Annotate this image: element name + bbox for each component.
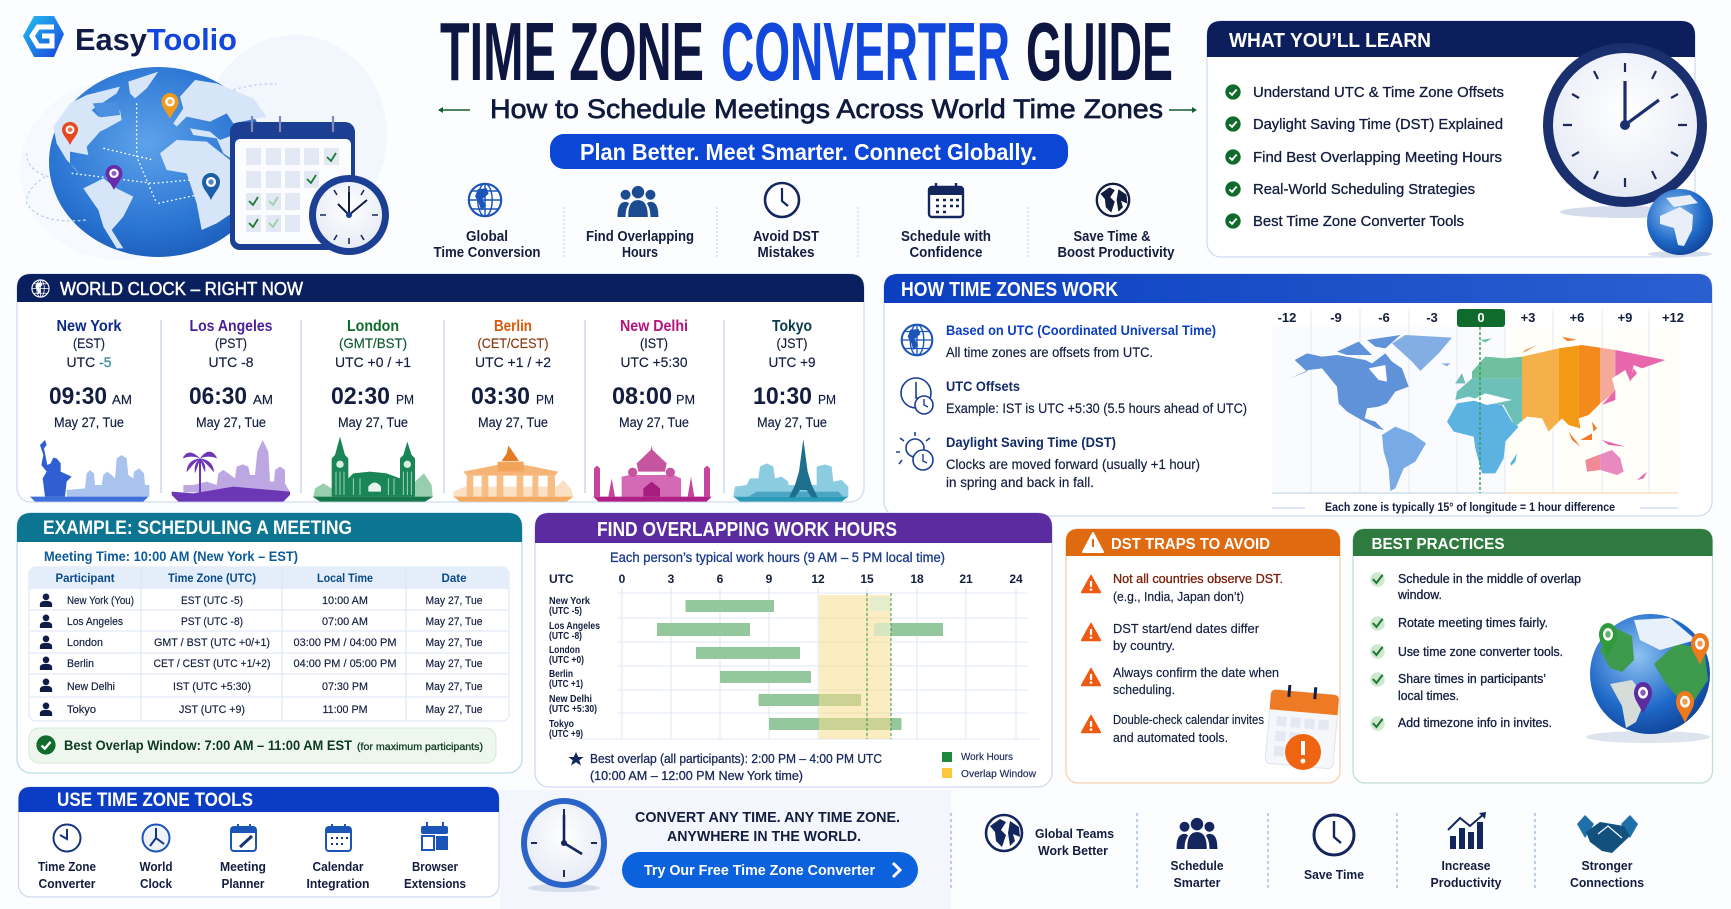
row: Los Angeles	[40, 615, 482, 628]
best overlap note: (10:00 AM – 12:00 PM New York time)	[590, 768, 803, 783]
map: zone labels: -9	[1330, 310, 1342, 325]
map: zone labels: -3	[1426, 310, 1438, 325]
clock: Los Angeles: AM	[253, 392, 273, 407]
practice list: Schedule in the middle of overlap	[1398, 572, 1581, 586]
overlap header	[535, 513, 1052, 543]
trap: confirm date: Always confirm the date when	[1113, 666, 1279, 680]
icon: small globe	[1647, 189, 1713, 257]
practices header: BEST PRACTICES	[1372, 536, 1505, 553]
tool: browser extensions	[404, 822, 466, 891]
chart row labels: (UTC +5:30)	[549, 703, 597, 715]
chart row labels: Los Angeles	[549, 620, 600, 632]
title: CONVERTER	[721, 5, 1010, 98]
example header: EXAMPLE: SCHEDULING A MEETING	[43, 517, 352, 539]
clock: Tokyo: Tokyo	[772, 318, 812, 335]
trap: dates differ: by country.	[1113, 639, 1175, 653]
DST header: DST TRAPS TO AVOID	[1111, 536, 1270, 553]
tagline pill	[550, 134, 1068, 169]
clock: Los Angeles: May 27, Tue	[196, 415, 266, 430]
benefit: stronger connections: Stronger	[1582, 859, 1633, 873]
chart row labels: Berlin	[549, 668, 573, 680]
trap: not all countries: (e.g., India, Japan don’t)	[1113, 590, 1244, 604]
item: UTC offsets	[901, 378, 1247, 416]
chart axis: 12	[811, 572, 825, 586]
clock: New York: New York	[56, 318, 122, 335]
practice list	[1370, 572, 1581, 731]
how time zones header: HOW TIME ZONES WORK	[901, 279, 1118, 301]
chart legend	[942, 751, 1036, 780]
clock: London: UTC +0 / +1	[335, 354, 411, 370]
benefit: global time conversion: Global	[466, 229, 508, 245]
item: based on UTC	[902, 322, 1216, 360]
benefit: stronger connections: Connections	[1570, 876, 1644, 890]
chart axis: 21	[959, 572, 973, 586]
benefit: schedule with confidence: Confidence	[910, 245, 982, 261]
benefit: schedule smarter: Schedule	[1170, 859, 1224, 873]
clock: London: PM	[396, 392, 414, 407]
chart row labels: Tokyo	[549, 718, 574, 730]
overlap window	[819, 593, 891, 739]
chart axis: 3	[668, 572, 675, 586]
callout: best overlap window: (for maximum participants)	[357, 741, 483, 753]
chart: work hours gantt	[549, 572, 1040, 740]
world clock header	[17, 274, 864, 302]
panel: what you'll learn	[1207, 21, 1713, 257]
clock: Los Angeles: (PST)	[215, 335, 247, 351]
clock: New Delhi: May 27, Tue	[619, 415, 689, 430]
row: Berlin: 04:00 PM / 05:00 PM	[294, 658, 396, 670]
learn list: Understand UTC & Time Zone Offsets	[1253, 85, 1504, 101]
benefit: increase productivity	[1430, 812, 1502, 890]
clock: Tokyo: 10:30	[753, 383, 812, 410]
best overlap note	[568, 751, 882, 783]
chart row labels: (UTC +1)	[549, 678, 583, 690]
learn list	[1225, 84, 1504, 230]
tool: calendar integration: Integration	[306, 876, 370, 891]
panel: DST traps to avoid	[1066, 529, 1340, 783]
clock: London: London	[347, 318, 399, 335]
row: New Delhi: New Delhi	[67, 681, 115, 693]
row: Berlin	[40, 657, 482, 670]
map: zone labels: -12	[1278, 310, 1296, 325]
benefit: global time conversion	[434, 184, 540, 261]
clock: London: May 27, Tue	[338, 415, 408, 430]
practice list: Use time zone converter tools.	[1398, 645, 1563, 659]
practice list: window.	[1397, 588, 1442, 602]
item: daylight saving time: Daylight Saving Time (DST)	[946, 434, 1116, 450]
row: Tokyo: 11:00 PM	[322, 704, 368, 716]
tool: browser extensions: Extensions	[404, 876, 466, 891]
clock: New Delhi: 08:00	[612, 383, 672, 410]
benefit: schedule smarter: Smarter	[1174, 876, 1221, 890]
title: TIME ZONE	[440, 5, 704, 98]
clock: Berlin: (CET/CEST)	[478, 335, 548, 351]
clock: Tokyo: PM	[818, 392, 836, 407]
chart bars	[657, 600, 943, 730]
benefit: avoid DST mistakes: Mistakes	[758, 245, 814, 261]
map: zone labels: +12	[1662, 310, 1684, 325]
chart axis: 15	[860, 572, 874, 586]
clock: Berlin: May 27, Tue	[478, 415, 548, 430]
tools header: USE TIME ZONE TOOLS	[57, 790, 253, 811]
skyline: Los Angeles	[172, 440, 290, 502]
row: New Delhi: May 27, Tue	[426, 681, 482, 693]
illustration: calendar	[230, 116, 355, 250]
benefit: schedule smarter	[1170, 818, 1224, 890]
trap: confirm date: scheduling.	[1113, 683, 1175, 697]
row: London: GMT / BST (UTC +0/+1)	[154, 637, 270, 649]
chart axis: 0	[619, 572, 626, 586]
item: based on UTC: Based on UTC (Coordinated Universal Time)	[946, 322, 1216, 338]
benefit: increase productivity: Increase	[1442, 859, 1491, 873]
clock: Tokyo: (JST)	[776, 335, 808, 351]
map: zone labels: +3	[1521, 310, 1535, 325]
benefit: schedule with confidence: Schedule with	[901, 229, 991, 245]
trap: double-check invites	[1082, 713, 1264, 745]
row: New York: May 27, Tue	[426, 595, 482, 607]
callout: best overlap window	[29, 728, 496, 763]
clock: London: (GMT/BST)	[339, 335, 407, 351]
table header row: Local Time	[317, 571, 373, 585]
benefit: save time	[1304, 815, 1364, 882]
row: New Delhi: IST (UTC +5:30)	[173, 681, 251, 693]
clock: New York: AM	[112, 392, 132, 407]
row: New York: New York (You)	[67, 595, 134, 607]
meeting time: Meeting Time: 10:00 AM (New York – EST)	[44, 549, 298, 564]
clock: New York: May 27, Tue	[54, 415, 124, 430]
clock: Berlin: PM	[536, 392, 554, 407]
benefits strip	[951, 812, 1644, 890]
table header row	[56, 571, 467, 585]
table header row: Date	[442, 571, 467, 585]
clock: Tokyo: UTC +9	[768, 354, 816, 370]
map: zone labels: -6	[1378, 310, 1390, 325]
CTA text: CONVERT ANY TIME. ANY TIME ZONE.	[635, 809, 900, 826]
title	[440, 5, 1173, 98]
map: zone labels	[1278, 309, 1684, 327]
row: Tokyo: Tokyo	[67, 704, 96, 716]
row: London	[40, 636, 482, 649]
tool: calendar integration	[306, 824, 370, 891]
practice list: Rotate meeting times fairly.	[1398, 616, 1548, 630]
clock: New York: 09:30	[49, 383, 107, 410]
tool: time zone converter	[38, 824, 96, 891]
best overlap note: Best overlap (all participants): 2:00 PM – 4:00 PM UTC	[590, 751, 882, 766]
trap: dates differ	[1082, 622, 1259, 653]
row: Los Angeles: May 27, Tue	[426, 616, 482, 628]
practices header	[1353, 529, 1712, 556]
chart legend: Overlap Window	[961, 768, 1036, 780]
row: Los Angeles: Los Angeles	[67, 616, 123, 628]
chart row labels: London	[549, 644, 580, 656]
learn list: Best Time Zone Converter Tools	[1253, 214, 1464, 230]
map: continents	[1290, 327, 1669, 493]
map caption: Each zone is typically 15° of longitude = 1 hour difference	[1325, 500, 1615, 514]
practice list: local times.	[1398, 689, 1459, 703]
clock: London	[313, 318, 433, 502]
CTA button: Try Our Free Time Zone Converter	[644, 863, 875, 879]
benefit: save time and boost productivity: Save Time &	[1074, 229, 1151, 245]
DST header	[1066, 529, 1340, 556]
chart row labels: New Delhi	[549, 693, 592, 705]
skyline: Tokyo	[733, 439, 848, 502]
illustration: desk clock	[309, 175, 389, 255]
title: GUIDE	[1026, 5, 1173, 98]
item: daylight saving time: Clocks are moved forward (usually +1 hour)	[946, 457, 1200, 472]
clock: New Delhi: PM	[676, 392, 695, 407]
benefit: global teams	[986, 815, 1114, 858]
practice list: Share times in participants’	[1398, 672, 1546, 686]
row: Tokyo: May 27, Tue	[426, 704, 482, 716]
benefit icon row	[434, 183, 1174, 261]
icon: warning calendar	[1265, 683, 1340, 770]
panel: best practices	[1353, 529, 1712, 783]
call to action	[521, 798, 918, 892]
chart axis: UTC	[549, 572, 574, 586]
trap: confirm date	[1082, 666, 1279, 697]
chart axis: 24	[1009, 572, 1023, 586]
clock: New York: (EST)	[73, 335, 105, 351]
panel: find overlapping work hours	[535, 513, 1052, 787]
learn list: Daylight Saving Time (DST) Explained	[1253, 117, 1503, 133]
clock: New York	[30, 318, 149, 502]
item: based on UTC: All time zones are offsets from UTC.	[946, 345, 1153, 360]
skyline: New Delhi	[593, 446, 712, 502]
clock: Berlin: UTC +1 / +2	[475, 354, 551, 370]
CTA text: ANYWHERE IN THE WORLD.	[667, 828, 861, 845]
row: Tokyo: JST (UTC +9)	[179, 704, 245, 716]
item: UTC offsets: Example: IST is UTC +5:30 (5.5 hours ahead of UTC)	[946, 401, 1247, 416]
row: New York: EST (UTC -5)	[181, 595, 243, 607]
row: London: London	[67, 637, 103, 649]
trap: not all countries: Not all countries observe DST.	[1113, 572, 1283, 586]
chart row labels: New York	[549, 595, 590, 607]
logo: EasyToolio: EasyToolio	[75, 22, 237, 57]
row: Los Angeles: PST (UTC -8)	[181, 616, 243, 628]
chart axis: 9	[766, 572, 773, 586]
benefit: avoid DST mistakes: Avoid DST	[753, 229, 819, 245]
icon: big clock	[1543, 43, 1707, 218]
row: New York: 10:00 AM	[322, 595, 368, 607]
benefit: stronger connections	[1570, 815, 1644, 890]
panel: world clock	[17, 274, 864, 502]
tool: meeting planner: Meeting	[220, 859, 266, 874]
chart row labels: (UTC +0)	[549, 654, 584, 666]
chart axis: 18	[910, 572, 924, 586]
item: daylight saving time: in spring and back in fall.	[946, 475, 1094, 490]
tool: calendar integration: Calendar	[312, 859, 364, 874]
benefit: find overlapping hours: Find Overlapping	[586, 229, 694, 245]
tool: world clock	[140, 824, 173, 891]
learn header	[1207, 21, 1695, 57]
map: zone labels: +6	[1570, 310, 1584, 325]
tagline pill: Plan Better. Meet Smarter. Connect Globally.	[580, 139, 1037, 165]
chart axis: 6	[717, 572, 724, 586]
item: UTC offsets: UTC Offsets	[946, 378, 1020, 394]
clock: New Delhi	[593, 318, 712, 502]
map: zone labels: 0	[1477, 310, 1485, 325]
row: Berlin: CET / CEST (UTC +1/+2)	[154, 658, 270, 670]
benefit: schedule with confidence	[901, 183, 991, 261]
clock: Los Angeles	[172, 318, 290, 502]
chart row labels: (UTC -8)	[549, 630, 582, 642]
clock: Berlin: Berlin	[494, 318, 532, 335]
trap: double-check invites: Double-check calendar invites	[1113, 713, 1264, 727]
tool: world clock: Clock	[140, 876, 173, 891]
benefit: global teams: Global Teams	[1035, 827, 1114, 841]
chart row labels: (UTC -5)	[549, 605, 582, 617]
skyline: New York	[30, 440, 149, 502]
overlap header: FIND OVERLAPPING WORK HOURS	[597, 519, 897, 541]
clock: Los Angeles: Los Angeles	[190, 318, 273, 335]
benefit: increase productivity: Productivity	[1430, 876, 1502, 890]
benefit: save time and boost productivity: Boost Productivity	[1058, 245, 1174, 261]
benefit: global time conversion: Time Conversion	[434, 245, 540, 261]
row: New York	[40, 594, 482, 607]
clock: Tokyo: May 27, Tue	[757, 415, 827, 430]
clock: Tokyo	[733, 318, 848, 502]
tool: time zone converter: Time Zone	[38, 859, 96, 874]
row: Tokyo	[40, 703, 482, 716]
illustration: globe with pins	[27, 67, 277, 257]
chart row labels: (UTC +9)	[549, 728, 583, 740]
row: Los Angeles: 07:00 AM	[322, 616, 368, 628]
panel: example scheduling a meeting	[17, 513, 522, 773]
table header row: Participant	[56, 571, 115, 585]
learn list: Find Best Overlapping Meeting Hours	[1253, 150, 1502, 166]
row: New Delhi: 07:30 PM	[322, 681, 368, 693]
clock: London: 02:30	[331, 383, 390, 410]
learn list: Real-World Scheduling Strategies	[1253, 182, 1475, 198]
panel: how time zones work	[884, 274, 1712, 516]
map: zone labels: +9	[1618, 310, 1632, 325]
chart row labels	[549, 595, 600, 740]
clock: New Delhi: (IST)	[640, 335, 668, 351]
icon: blue clock	[521, 798, 607, 892]
clock: Los Angeles: UTC -8	[208, 354, 254, 370]
tool: browser extensions: Browser	[412, 859, 458, 874]
trap: not all countries	[1082, 572, 1283, 604]
CTA button	[622, 852, 918, 888]
illustration: globe, calendar and clock	[27, 67, 389, 257]
clock: Berlin: 03:30	[471, 383, 530, 410]
clock: New York: UTC -5	[66, 354, 112, 370]
clock: New Delhi: New Delhi	[620, 318, 688, 335]
clock: Los Angeles: 06:30	[189, 383, 247, 410]
CTA text	[635, 809, 900, 845]
skyline: Berlin	[453, 446, 573, 502]
benefit: avoid DST mistakes	[753, 183, 819, 261]
illustration: pinned globe	[1586, 614, 1710, 743]
world clock header: WORLD CLOCK – RIGHT NOW	[60, 279, 303, 299]
table: participants	[29, 567, 509, 721]
clock: Berlin	[453, 318, 573, 502]
chart legend: Work Hours	[961, 751, 1013, 763]
row: Berlin: Berlin	[67, 658, 94, 670]
how time zones header	[884, 274, 1712, 303]
row: London: 03:00 PM / 04:00 PM	[294, 637, 396, 649]
trap: double-check invites: and automated tools.	[1113, 731, 1228, 745]
logo: EasyToolio	[23, 16, 237, 57]
tools header	[18, 787, 499, 812]
table header row: Time Zone (UTC)	[168, 571, 256, 585]
subtitle with arrows: How to Schedule Meetings Across World Time Zones	[490, 94, 1163, 124]
overlap subtitle: Each person’s typical work hours (9 AM – 5 PM local time)	[610, 550, 945, 565]
clock: New Delhi: UTC +5:30	[620, 354, 688, 370]
tool: world clock: World	[140, 859, 173, 874]
benefit: find overlapping hours: Hours	[622, 245, 658, 261]
trap: dates differ: DST start/end dates differ	[1113, 622, 1259, 636]
map: world time zones	[1272, 309, 1684, 493]
practice list: Add timezone info in invites.	[1398, 716, 1552, 730]
row: New Delhi	[40, 679, 482, 693]
panel: use time zone tools	[18, 787, 499, 897]
benefit: find overlapping hours	[586, 186, 694, 261]
learn header: WHAT YOU’LL LEARN	[1229, 30, 1431, 52]
tool: meeting planner: Planner	[222, 876, 264, 891]
chart axis	[549, 572, 1023, 586]
example header	[17, 513, 522, 542]
row: London: May 27, Tue	[426, 637, 482, 649]
tool: meeting planner	[220, 824, 266, 891]
benefit: save time: Save Time	[1304, 868, 1364, 882]
skyline: London	[313, 437, 433, 502]
item: daylight saving time	[896, 432, 1200, 490]
benefit: global teams: Work Better	[1038, 844, 1108, 858]
benefit: save time and boost productivity	[1058, 184, 1174, 261]
row: Berlin: May 27, Tue	[426, 658, 482, 670]
tool: time zone converter: Converter	[38, 876, 96, 891]
callout: best overlap window: Best Overlap Window: 7:00 AM – 11:00 AM EST	[64, 738, 353, 753]
